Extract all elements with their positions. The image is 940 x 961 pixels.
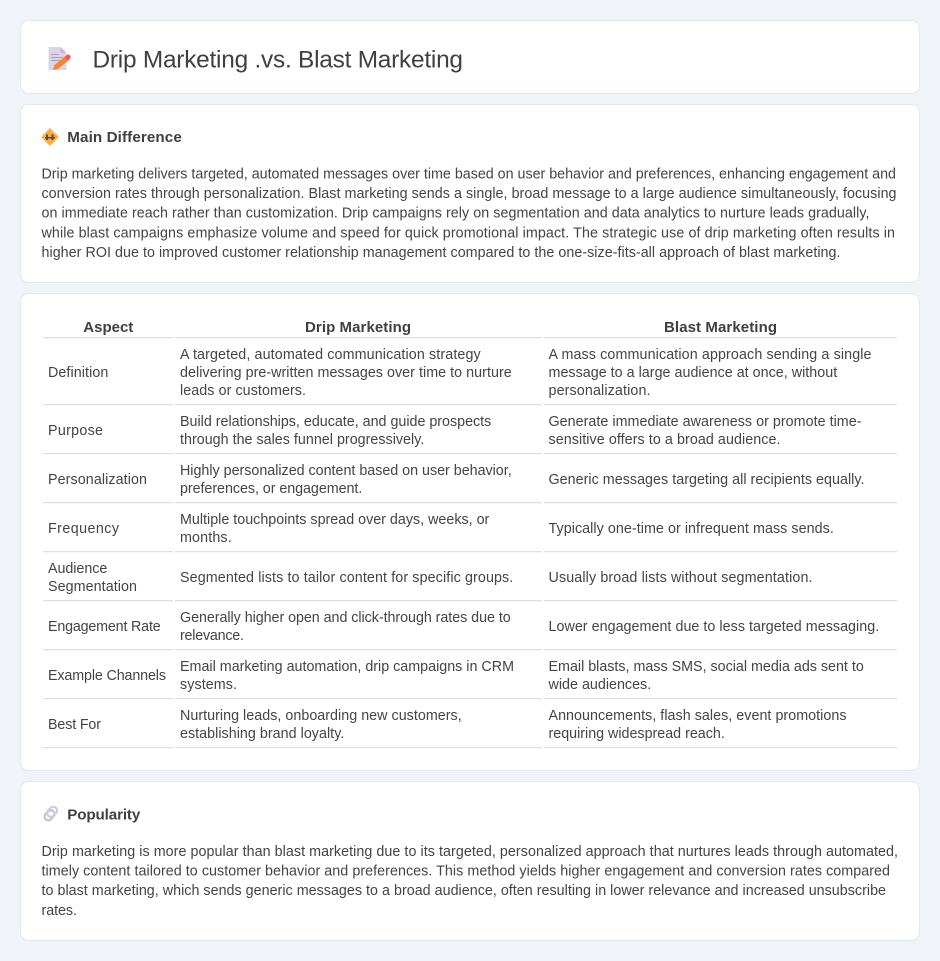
- table row: frequency: Typically one-time or infrequent mass sends.: [548, 521, 834, 537]
- panel: popularity: [20, 782, 920, 940]
- table row: personalization: Generic messages targeting all recipients equally.: [548, 472, 864, 488]
- table header row: Blast Marketing: [664, 319, 777, 336]
- table row: purpose: Purpose: [48, 423, 103, 439]
- table row: example channels: wide audiences.: [548, 677, 651, 693]
- table row: best for: establishing brand loyalty.: [180, 726, 344, 742]
- icon: warning diamond: [42, 128, 58, 146]
- text block: popularity paragraph: to blast marketing, which sends generic messages to a broad audience, often resulting in lower relevance and increased unsubscribe: [42, 883, 886, 899]
- table row: definition: Definition: [48, 365, 108, 381]
- title: Drip Marketing .vs. Blast Marketing: [92, 46, 463, 74]
- text block: popularity paragraph: rates.: [42, 903, 77, 919]
- text block: main difference paragraph: conversion rates through personalization. Blast marketing sends a single, broad message to a large audience simultaneously, focusing: [42, 186, 897, 202]
- table row: best for: Best For: [48, 717, 101, 733]
- table row: audience segmentation: Segmented lists to tailor content for specific groups.: [180, 570, 513, 586]
- table row: engagement rate: relevance.: [180, 628, 244, 644]
- table header row: [83, 319, 777, 336]
- table row: engagement rate: [48, 610, 879, 644]
- icon: chain link: [43, 805, 59, 822]
- icon: document with pencil: [48, 47, 71, 70]
- heading: popularity: Popularity: [67, 806, 141, 823]
- table row: audience segmentation: Audience: [48, 561, 107, 577]
- table row: audience segmentation: Usually broad lists without segmentation.: [548, 570, 812, 586]
- table row: example channels: systems.: [180, 677, 237, 693]
- table row: definition: A mass communication approach sending a single: [548, 347, 872, 363]
- table row: example channels: Email blasts, mass SMS, social media ads sent to: [548, 659, 864, 675]
- table row: engagement rate: Generally higher open and click-through rates due to: [180, 610, 511, 626]
- table row: example channels: Example Channels: [48, 668, 166, 684]
- table row: personalization: preferences, or engagement.: [180, 481, 362, 497]
- table row: frequency: Multiple touchpoints spread over days, weeks, or: [180, 512, 490, 528]
- table row: engagement rate: Lower engagement due to less targeted messaging.: [548, 619, 879, 635]
- table header row: Drip Marketing: [305, 319, 411, 336]
- table row: best for: [48, 708, 846, 742]
- text block: main difference paragraph: higher ROI due to improved customer relationship management compared to the one-size-fits-all approach of blast marketing.: [42, 245, 840, 261]
- table row: best for: requiring widespread reach.: [548, 726, 725, 742]
- table row: purpose: Generate immediate awareness or promote time-: [548, 414, 862, 430]
- table row: audience segmentation: Segmentation: [48, 579, 137, 595]
- table row: example channels: [48, 659, 864, 693]
- table row: frequency: Frequency: [48, 521, 120, 537]
- table row: definition: message to a large audience at once, without: [548, 365, 837, 381]
- panel: comparison table: [20, 294, 920, 770]
- table row: frequency: [48, 512, 834, 546]
- text block: main difference paragraph: Drip marketing delivers targeted, automated messages over time based on user behavior and preferences, enhancing engagement and: [42, 166, 896, 182]
- table row: best for: Announcements, flash sales, event promotions: [548, 708, 846, 724]
- text block: popularity paragraph: timely content tailored to customer behavior and preferences. This method yields higher engagement and conversion rates compared: [42, 864, 890, 880]
- table row: purpose: Build relationships, educate, and guide prospects: [180, 414, 491, 430]
- table row: personalization: [48, 463, 864, 497]
- text block: main difference paragraph: [40, 166, 897, 261]
- table row: purpose: sensitive offers to a broad audience.: [548, 432, 780, 448]
- table row: definition: A targeted, automated communication strategy: [180, 347, 482, 363]
- table row: engagement rate: Engagement Rate: [48, 619, 161, 635]
- text block: main difference paragraph: while blast campaigns emphasize volume and speed for quick promotional impact. The strategic use of drip marketing often results in: [40, 225, 895, 241]
- table row: definition: [48, 347, 872, 399]
- heading: main difference: Main Difference: [67, 129, 182, 146]
- text block: popularity paragraph: [42, 844, 898, 919]
- table header row: Aspect: [83, 319, 133, 336]
- table row: best for: Nurturing leads, onboarding new customers,: [180, 708, 462, 724]
- text block: main difference paragraph: on immediate reach rather than customization. Drip campaigns rely on segmentation and data analytics to nurture leads gradually,: [42, 206, 870, 222]
- table row: definition: delivering pre-written messages over time to nurture: [180, 365, 512, 381]
- text block: popularity paragraph: Drip marketing is more popular than blast marketing due to its targeted, personalized approach that nurtures leads through automated,: [42, 844, 898, 860]
- table row: example channels: Email marketing automation, drip campaigns in CRM: [180, 659, 514, 675]
- table row: definition: leads or customers.: [180, 383, 306, 399]
- table row: purpose: [48, 414, 862, 448]
- table row: definition: personalization.: [548, 383, 650, 399]
- panel: page header: [20, 20, 920, 94]
- table row: personalization: Highly personalized content based on user behavior,: [180, 463, 512, 479]
- table row: purpose: through the sales funnel progressively.: [180, 432, 424, 448]
- table row: personalization: Personalization: [48, 472, 147, 488]
- table row: frequency: months.: [180, 530, 232, 546]
- table row: audience segmentation: [48, 561, 812, 595]
- panel: main difference: [20, 104, 920, 282]
